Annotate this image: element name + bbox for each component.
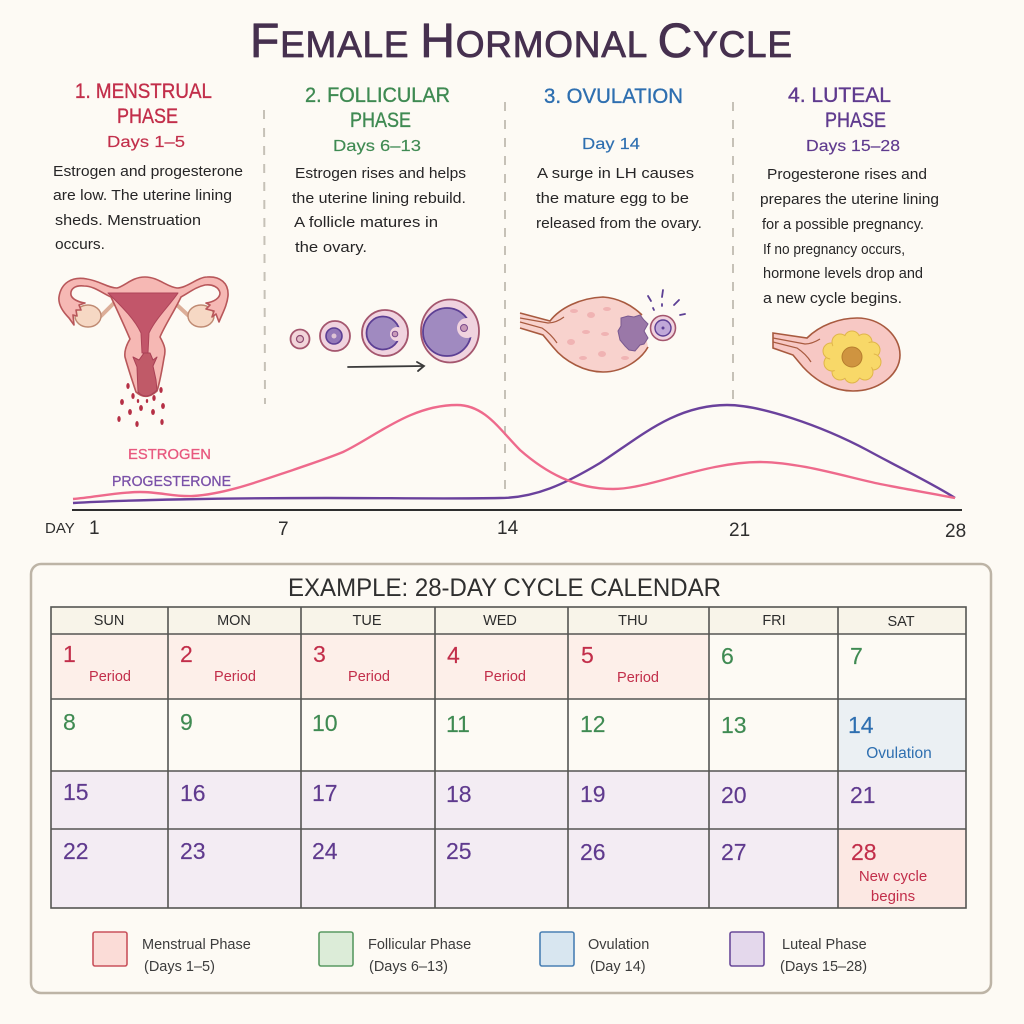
- dates: week 2: 9: [180, 709, 193, 735]
- text: luteal description: for a possible pregnancy.: [762, 216, 924, 233]
- divider 3: [732, 102, 734, 404]
- axis line: [72, 509, 962, 511]
- ovulation cell: [848, 712, 932, 762]
- dates: week 3: 15: [63, 779, 89, 805]
- calendar grid: [51, 607, 966, 908]
- calendar frame: [31, 564, 991, 993]
- text: menstrual description: are low. The uterine lining: [53, 187, 232, 204]
- dates: week 3: 18: [446, 781, 472, 807]
- period labels: Period: [348, 669, 390, 685]
- heading: menstrual phase: PHASE: [117, 105, 178, 128]
- legend: follicular: (Days 6–13): [369, 959, 448, 975]
- heading: luteal phase: 4. LUTEAL: [788, 84, 891, 107]
- icon: uterus: [59, 277, 228, 427]
- dates: week 3: 21: [850, 782, 876, 808]
- period labels: [89, 669, 659, 686]
- text: luteal description: a new cycle begins.: [763, 290, 902, 307]
- new cycle cell: 28: [851, 839, 877, 865]
- hormone chart: [45, 405, 966, 542]
- dates: week 4: 23: [180, 838, 206, 864]
- icon: ovary releasing egg: [520, 290, 685, 372]
- dates: week 2: 10: [312, 710, 338, 736]
- divider 1: [264, 110, 265, 404]
- weekday headers: [94, 613, 915, 630]
- days: menstrual: Days 1–5: [107, 134, 185, 151]
- text: follicular description: Estrogen rises and helps: [295, 165, 466, 182]
- arrow: follicle growth: [348, 362, 424, 371]
- heading: follicular phase: 2. FOLLICULAR: [305, 84, 450, 107]
- axis labels: 28: [945, 521, 966, 542]
- legend: ovulation: [540, 932, 649, 975]
- weekday headers: WED: [483, 613, 517, 629]
- days: follicular: Days 6–13: [333, 138, 421, 155]
- ovulation cell: 14: [848, 712, 874, 738]
- weekday headers: SUN: [94, 613, 124, 629]
- ovulation cell: Ovulation: [866, 745, 932, 762]
- text: ovulation description: the mature egg to be: [536, 190, 689, 207]
- curve: estrogen: [73, 405, 955, 499]
- label: progesterone: PROGESTERONE: [112, 473, 231, 490]
- axis labels: 1: [89, 518, 100, 539]
- text: luteal description: prepares the uterine lining: [760, 191, 939, 208]
- panel: luteal phase: [760, 84, 939, 391]
- days: luteal: Days 15–28: [806, 138, 900, 155]
- period labels: Period: [484, 669, 526, 685]
- text: menstrual description: sheds. Menstruation: [55, 212, 201, 229]
- new cycle cell: [851, 839, 927, 905]
- weekday headers: TUE: [352, 613, 382, 629]
- dates: week 1: 5: [581, 642, 594, 668]
- heading: follicular phase: [305, 84, 450, 132]
- legend: menstrual: (Days 1–5): [144, 959, 215, 975]
- heading: menstrual phase: [75, 80, 212, 128]
- dates: week 4: 27: [721, 839, 747, 865]
- axis labels: DAY: [45, 520, 75, 537]
- days: ovulation: Day 14: [582, 136, 640, 153]
- text: menstrual description: Estrogen and progesterone: [53, 163, 243, 180]
- dates: week 3: 20: [721, 782, 747, 808]
- panel: ovulation: [520, 85, 702, 372]
- text: luteal description: If no pregnancy occurs,: [763, 241, 905, 258]
- panel: calendar: [31, 564, 991, 993]
- dates: week 1: 7: [850, 643, 863, 669]
- text: follicular description: the ovary.: [295, 239, 367, 256]
- label: estrogen: ESTROGEN: [128, 446, 211, 463]
- dates: week 4: [63, 838, 747, 865]
- dates: week 2: 12: [580, 711, 606, 737]
- text: luteal description: [760, 166, 939, 307]
- text: menstrual description: occurs.: [55, 236, 105, 253]
- axis labels: 7: [278, 519, 289, 540]
- curve: progesterone: [73, 405, 955, 503]
- legend: ovulation: Ovulation: [588, 937, 649, 953]
- dates: week 1: 3: [313, 641, 326, 667]
- dates: week 4: 26: [580, 839, 606, 865]
- dates: week 4: 24: [312, 838, 338, 864]
- period labels: Period: [89, 669, 131, 685]
- text: follicular description: A follicle matures in: [294, 214, 438, 231]
- dates: week 2: 13: [721, 712, 747, 738]
- dates: week 2: [63, 709, 747, 738]
- dates: week 4: 22: [63, 838, 89, 864]
- heading: ovulation: 3. OVULATION: [544, 85, 683, 108]
- panel: menstrual phase: [53, 80, 243, 427]
- panel: follicular phase: [290, 84, 479, 371]
- text: follicular description: the uterine lining rebuild.: [292, 190, 466, 207]
- axis labels: [45, 518, 966, 542]
- icon: developing follicles: [290, 300, 479, 371]
- legend: ovulation: (Day 14): [590, 959, 646, 975]
- text: follicular description: [292, 165, 466, 256]
- legend: luteal: Luteal Phase: [782, 937, 867, 953]
- text: ovulation description: [536, 165, 702, 232]
- period labels: Period: [617, 670, 659, 686]
- text: luteal description: hormone levels drop and: [763, 265, 923, 282]
- dates: week 1: 1: [63, 641, 76, 667]
- heading: luteal phase: PHASE: [825, 109, 886, 132]
- dates: week 3: 17: [312, 780, 338, 806]
- dates: week 1: 6: [721, 643, 734, 669]
- weekday headers: FRI: [762, 613, 786, 629]
- divider 2: [504, 102, 506, 498]
- heading: calendar: EXAMPLE: 28-DAY CYCLE CALENDAR: [288, 574, 721, 602]
- text: ovulation description: A surge in LH causes: [537, 165, 694, 182]
- heading: follicular phase: PHASE: [350, 109, 411, 132]
- legend: menstrual: [93, 932, 251, 975]
- legend: [93, 932, 867, 975]
- new cycle cell: begins: [871, 888, 915, 905]
- period labels: Period: [214, 669, 256, 685]
- legend: follicular: Follicular Phase: [368, 937, 471, 953]
- dates: week 3: [63, 779, 876, 808]
- legend: luteal: (Days 15–28): [780, 959, 867, 975]
- legend: menstrual: Menstrual Phase: [142, 937, 251, 953]
- dates: week 1: 2: [180, 641, 193, 667]
- dates: week 1: [63, 641, 863, 669]
- text: ovulation description: released from the ovary.: [536, 215, 702, 232]
- legend: follicular: [319, 932, 471, 975]
- new cycle cell: New cycle: [859, 868, 927, 885]
- title: FEMALE HORMONAL CYCLE: [250, 15, 792, 68]
- weekday headers: MON: [217, 613, 251, 629]
- icon: corpus luteum: [773, 318, 900, 391]
- dates: week 2: 11: [446, 711, 470, 737]
- text: menstrual description: [53, 163, 243, 253]
- dates: week 3: 16: [180, 780, 206, 806]
- dates: week 1: 4: [447, 642, 460, 668]
- dates: week 3: 19: [580, 781, 606, 807]
- axis labels: 21: [729, 520, 750, 541]
- heading: luteal phase: [788, 84, 891, 132]
- axis labels: 14: [497, 518, 519, 539]
- text: luteal description: Progesterone rises and: [767, 166, 927, 183]
- weekday headers: THU: [618, 613, 648, 629]
- legend: luteal: [730, 932, 867, 975]
- dates: week 2: 8: [63, 709, 76, 735]
- weekday headers: SAT: [887, 614, 915, 630]
- heading: menstrual phase: 1. MENSTRUAL: [75, 80, 212, 103]
- dates: week 4: 25: [446, 838, 472, 864]
